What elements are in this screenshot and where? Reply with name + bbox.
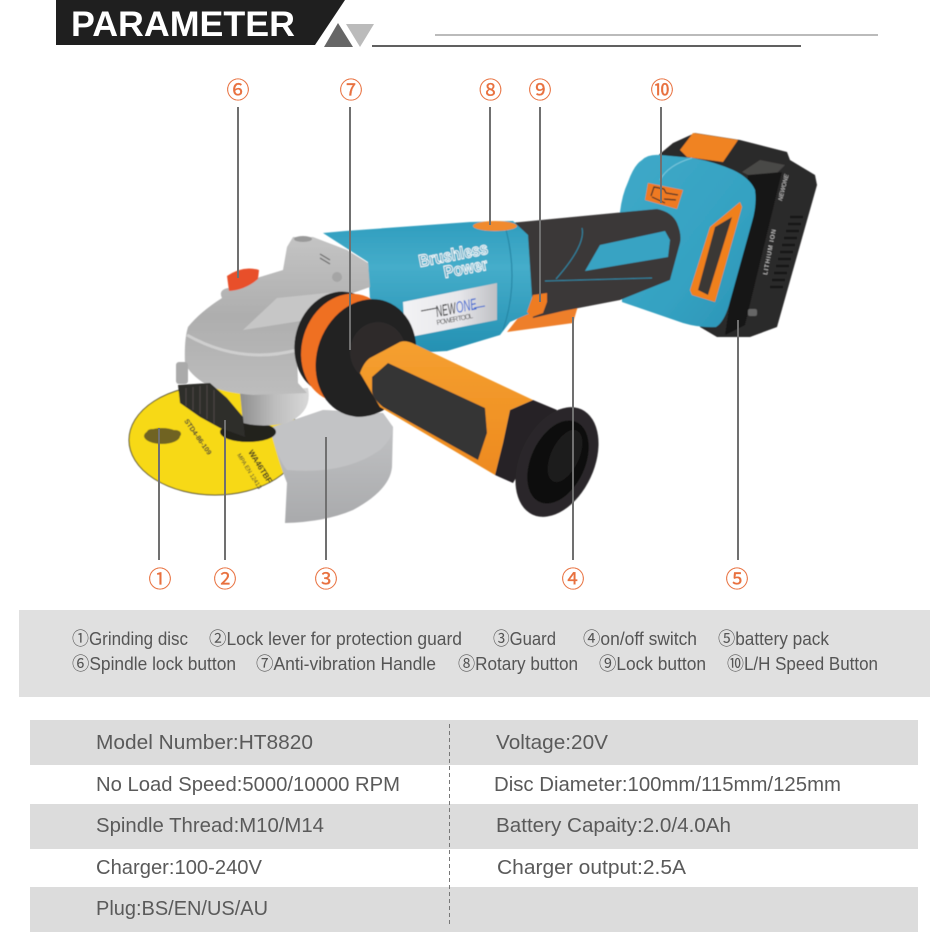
- motor body: [323, 221, 533, 353]
- disc logo: [144, 428, 181, 444]
- anti-vibration flange: [283, 282, 433, 431]
- legend row 2: [72, 654, 878, 674]
- callout numbers: ⑤: [726, 566, 748, 592]
- callout numbers: ②: [214, 566, 236, 592]
- grinding disc: WA46TBF: [246, 448, 274, 485]
- header triangles and rules: [324, 23, 878, 47]
- spindle nut: [220, 422, 276, 442]
- battery pack: NEWONE: [778, 173, 791, 201]
- specs left column: Spindle Thread:M10/M14: [96, 815, 324, 837]
- specs left column: [96, 732, 400, 920]
- legend row 1: [72, 629, 830, 649]
- legend row 2: ⑥Spindle lock button: [72, 654, 236, 674]
- brand label plate: ONE: [455, 296, 479, 317]
- legend row 1: ⑤battery pack: [718, 629, 830, 649]
- callout numbers: ⑥: [226, 77, 250, 103]
- legend row 2: ⑦Anti-vibration Handle: [256, 654, 436, 674]
- brand label plate: NEW: [435, 300, 458, 321]
- legend row 1: ②Lock lever for protection guard: [209, 629, 462, 649]
- rotary button: [473, 221, 517, 231]
- brand label plate: [403, 283, 497, 338]
- panel: parts legend: [19, 610, 930, 697]
- brand label plate: POWER TOOL: [436, 313, 474, 327]
- lock button: [527, 293, 547, 317]
- on/off switch paddle: [507, 306, 578, 332]
- callout numbers: ③: [314, 566, 338, 592]
- rear housing: [620, 155, 756, 327]
- lower gear ring: [240, 388, 309, 426]
- callout numbers: ①: [148, 566, 172, 592]
- legend row 1: ①Grinding disc: [72, 629, 188, 649]
- Brushless Power badge: [417, 239, 489, 282]
- legend row 1: ③Guard: [493, 629, 556, 649]
- specs right column: Battery Capaity:2.0/4.0Ah: [496, 815, 731, 837]
- legend row 2: ⑩L/H Speed Button: [727, 654, 878, 674]
- lock lever: [176, 362, 245, 437]
- callout numbers: ⑨: [528, 77, 552, 103]
- specs right column: Voltage:20V: [496, 732, 609, 754]
- spindle lock button: [227, 268, 259, 291]
- callout numbers: ④: [562, 566, 584, 592]
- grinding disc: MPA EN 12413: [235, 453, 262, 491]
- specs right column: [494, 732, 841, 879]
- legend row 2: ⑨Lock button: [599, 654, 706, 674]
- title banner: PARAMETER: [71, 5, 295, 44]
- panel: specification table: [30, 720, 918, 932]
- side handle: [360, 341, 615, 530]
- title banner: [56, 0, 345, 45]
- grinding disc: STD4-86-109: [182, 418, 212, 457]
- callout numbers: ⑧: [479, 77, 502, 103]
- legend row 2: ⑧Rotary button: [458, 654, 578, 674]
- grinding disc: [129, 385, 301, 495]
- head top facet: [187, 236, 342, 355]
- speed window: [690, 202, 742, 302]
- specs left column: Charger:100-240V: [96, 857, 263, 879]
- specs left column: Plug:BS/EN/US/AU: [96, 898, 268, 920]
- callout numbers: [148, 77, 748, 592]
- specs left column: No Load Speed:5000/10000 RPM: [96, 774, 400, 796]
- gear head: [185, 237, 370, 395]
- guard: [270, 410, 393, 523]
- callout numbers: ⑦: [340, 77, 362, 103]
- battery pack: LITHIUM ION: [763, 229, 778, 275]
- specs left column: Model Number:HT8820: [96, 732, 313, 754]
- battery pack: [655, 133, 817, 337]
- icon: L/H speed button: [645, 183, 683, 209]
- rear grip: [510, 209, 681, 318]
- product illustration: cordless angle grinder: [129, 133, 817, 530]
- Brushless Power badge: Power: [442, 255, 489, 282]
- callout leader lines: [159, 107, 738, 560]
- legend row 1: ④on/off switch: [583, 629, 697, 649]
- specs right column: Disc Diameter:100mm/115mm/125mm: [494, 774, 841, 796]
- Brushless Power badge: Brushless: [417, 239, 489, 271]
- specs right column: Charger output:2.5A: [497, 857, 687, 879]
- callout numbers: ⑩: [650, 77, 674, 103]
